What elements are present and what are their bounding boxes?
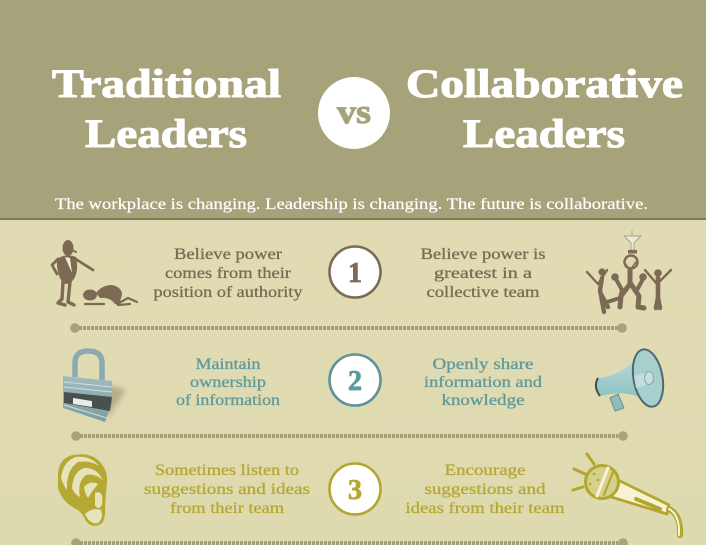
title: Traditional Leaders: Traditional	[52, 61, 281, 106]
icon: microphone	[573, 454, 680, 535]
text: traditional belief 3: Sometimes listen to	[155, 462, 299, 479]
text: collaborative belief 2: Openly share	[432, 356, 534, 373]
text: traditional belief 3: from their team	[170, 500, 284, 517]
icon: team lifting trophy	[587, 231, 671, 312]
text: collaborative belief 2: information and	[424, 374, 542, 391]
text: traditional belief 2: Maintain	[196, 356, 261, 373]
text: collaborative belief 3: Encourage	[444, 462, 526, 479]
number badge 2: 2	[348, 366, 362, 397]
number badge 1	[330, 246, 380, 298]
vs badge: vs	[337, 94, 371, 131]
text: traditional belief 1: position of authority	[154, 284, 303, 301]
header banner	[0, 0, 706, 220]
number badge 2	[330, 354, 380, 406]
text: collaborative belief 2: knowledge	[442, 392, 525, 409]
title: Collaborative Leaders: Collaborative	[406, 61, 683, 106]
icon: megaphone	[596, 347, 667, 411]
text: traditional belief 3: suggestions and ideas	[144, 481, 310, 498]
tagline: The workplace is changing. Leadership is changing. The future is collaborative.	[55, 196, 648, 213]
text: traditional belief 1: comes from their	[165, 265, 292, 282]
text: collaborative belief 1: collective team	[426, 284, 540, 301]
row 2: information	[63, 347, 667, 422]
divider 1	[70, 323, 627, 333]
text: collaborative belief 1: greatest in a	[434, 265, 532, 282]
text: collaborative belief 3: ideas from their team	[406, 500, 564, 517]
text: collaborative belief 1: Believe power is	[420, 246, 546, 263]
title: Collaborative Leaders: Leaders	[463, 111, 625, 156]
divider 2	[71, 431, 628, 441]
divider 3	[71, 538, 628, 545]
text: traditional belief 2: of information	[176, 392, 280, 409]
text: traditional belief 1: Believe power	[174, 246, 283, 263]
number badge 1: 1	[348, 258, 362, 289]
icon: boss pointing at kneeling person	[52, 240, 137, 305]
row 1: power	[52, 231, 671, 312]
title: Traditional Leaders: Leaders	[85, 111, 247, 156]
text: collaborative belief 3: suggestions and	[424, 481, 546, 498]
icon: ear	[58, 454, 107, 526]
icon: padlock	[63, 351, 126, 422]
text: traditional belief 2: ownership	[190, 374, 266, 391]
row 3: listening	[58, 454, 680, 535]
number badge 3	[330, 464, 380, 514]
vs badge	[318, 77, 390, 149]
number badge 3: 3	[348, 475, 362, 506]
